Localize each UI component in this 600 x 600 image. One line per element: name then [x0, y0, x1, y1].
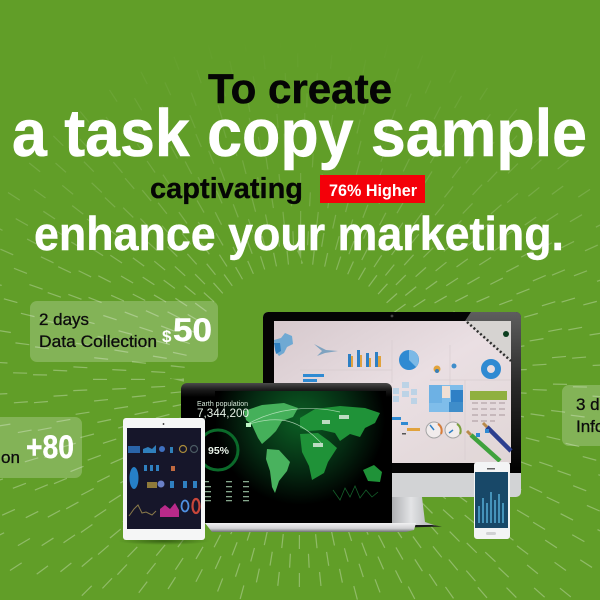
monitor: gauges — [426, 422, 461, 438]
laptop — [181, 383, 416, 532]
laptop screen glow — [215, 391, 386, 522]
card: data collection: Data Collection — [39, 332, 157, 351]
tablet: bottom row charts — [129, 499, 200, 517]
phone: chart bars — [478, 492, 504, 523]
monitor: notebook corner — [465, 321, 511, 362]
tablet camera — [163, 423, 164, 425]
laptop: waveform — [333, 486, 378, 500]
card: right clipped — [562, 385, 600, 446]
phone speaker — [487, 468, 495, 470]
monitor: data table — [470, 391, 507, 421]
card: left clipped: +80 — [26, 429, 74, 465]
monitor: blue map — [274, 333, 293, 356]
monitor — [263, 312, 521, 528]
monitor stand — [385, 497, 442, 528]
tablet screen — [127, 428, 201, 529]
tablet body — [123, 418, 205, 540]
card: data collection — [30, 301, 218, 362]
laptop base — [205, 523, 416, 532]
monitor: bar chart — [348, 350, 381, 367]
subheading: captivating: captivating — [150, 173, 303, 205]
monitor: faint panels — [300, 340, 511, 460]
laptop: world map — [244, 403, 382, 493]
laptop: population number: 7,344,200 — [197, 406, 249, 420]
monitor: pie chart — [399, 350, 419, 370]
monitor: donut chart — [484, 362, 498, 376]
tablet shadow — [118, 537, 210, 545]
tablet: top row charts — [128, 445, 198, 453]
card: data collection: $ — [162, 327, 172, 346]
tablet: middle row charts — [130, 465, 197, 489]
phone screen — [475, 472, 508, 528]
monitor: pencils — [467, 423, 511, 461]
laptop: map marker — [246, 423, 251, 427]
laptop lid — [181, 383, 392, 523]
card: data collection: 2 days — [39, 310, 89, 329]
monitor: timeline bars — [392, 417, 420, 434]
phone — [474, 462, 510, 539]
monitor screen — [274, 321, 511, 463]
heading: enhance your marketing.: enhance your marketing. — [34, 207, 564, 260]
heading: To create: To create — [208, 65, 392, 112]
monitor: left bars — [303, 374, 324, 382]
laptop: progress ring — [198, 430, 238, 470]
tablet — [123, 418, 205, 540]
laptop: connection lines — [246, 408, 340, 444]
phone home button — [486, 532, 496, 535]
monitor: small charts — [434, 364, 456, 373]
monitor body — [263, 312, 521, 497]
laptop: mini table — [205, 481, 249, 501]
laptop: 95% value: 95% — [208, 445, 230, 457]
badge: 76% Higher — [320, 175, 425, 203]
phone body — [474, 462, 510, 539]
badge: 76% Higher: 76% Higher — [329, 181, 417, 200]
laptop: map labels — [313, 415, 349, 447]
laptop: Earth population: Earth population — [197, 401, 248, 408]
monitor: small blocks — [393, 382, 417, 404]
monitor: scatter — [314, 344, 338, 356]
card: data collection: 50 — [173, 312, 212, 348]
card: left clipped: on — [1, 448, 20, 467]
card: left clipped — [0, 417, 82, 478]
monitor: treemap — [429, 385, 463, 412]
